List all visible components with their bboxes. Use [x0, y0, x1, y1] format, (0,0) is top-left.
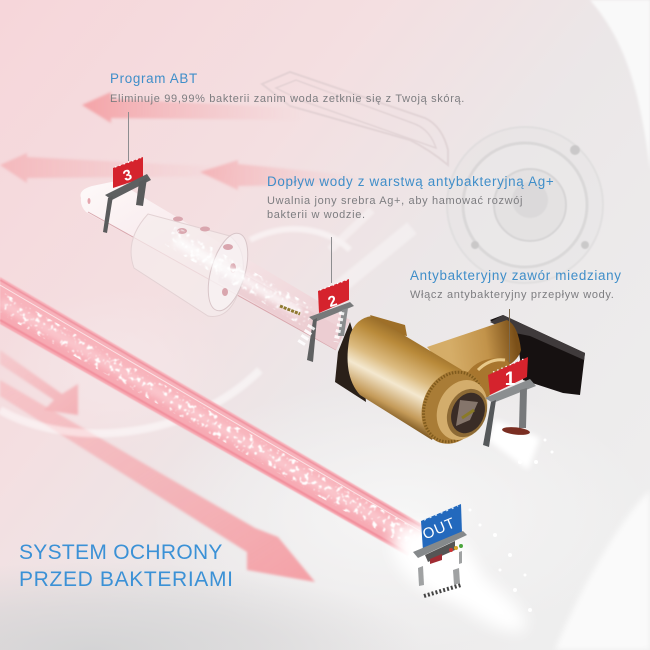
leader line 2: [330, 237, 332, 283]
label: Program ABT: [110, 71, 465, 105]
text: Dopływ wody description: bakterii w wodzie.: [267, 209, 366, 221]
text: Program ABT description: Eliminuje 99,99% bakterii zanim woda zetknie się z Twoją skórą.: [110, 93, 465, 105]
black handle: [490, 315, 585, 395]
text: zawór description: Włącz antybakteryjny przepływ wody.: [410, 289, 614, 301]
text: Dopływ wody description: Uwalnia jony srebra Ag+, aby hamować rozwój: [267, 195, 523, 207]
OUT sign: OUT: [420, 514, 458, 543]
OUT sign: [413, 504, 467, 596]
sign 2: [307, 279, 354, 362]
heading: Program ABT: Program ABT: [110, 71, 198, 86]
sign 2: 2: [326, 292, 339, 311]
white swirl: [0, 210, 412, 433]
background device outline: [262, 72, 603, 283]
filter cartridge: [131, 214, 310, 318]
sign 3: 3: [121, 166, 134, 185]
text: Dopływ wody description: [267, 195, 523, 221]
heading: Dopływ wody: Dopływ wody z warstwą antybakteryjną Ag+: [267, 174, 554, 189]
label: Antybakteryjny zawór miedziany: [410, 268, 622, 301]
brass valve body: [335, 315, 521, 454]
water splash at outlet: [378, 508, 536, 644]
leader line 3: [128, 112, 130, 161]
leader line 1: [508, 309, 510, 362]
splash around sign 2: [300, 312, 342, 345]
sign 3: [103, 157, 151, 233]
heading: Antybakteryjny zawór miedziany: Antybakteryjny zawór miedziany: [410, 268, 622, 283]
sign 1: 1: [505, 369, 516, 390]
title: [19, 541, 234, 591]
outlet tube: [0, 277, 425, 556]
title: PRZED BAKTERIAMI: [19, 568, 234, 591]
title: SYSTEM OCHRONY: [19, 541, 223, 564]
water splash at valve: [488, 420, 554, 470]
label: Dopływ wody: [267, 174, 554, 221]
background flow arrows: [0, 92, 360, 582]
sign 1: [483, 357, 536, 447]
inlet tube: [80, 181, 350, 350]
